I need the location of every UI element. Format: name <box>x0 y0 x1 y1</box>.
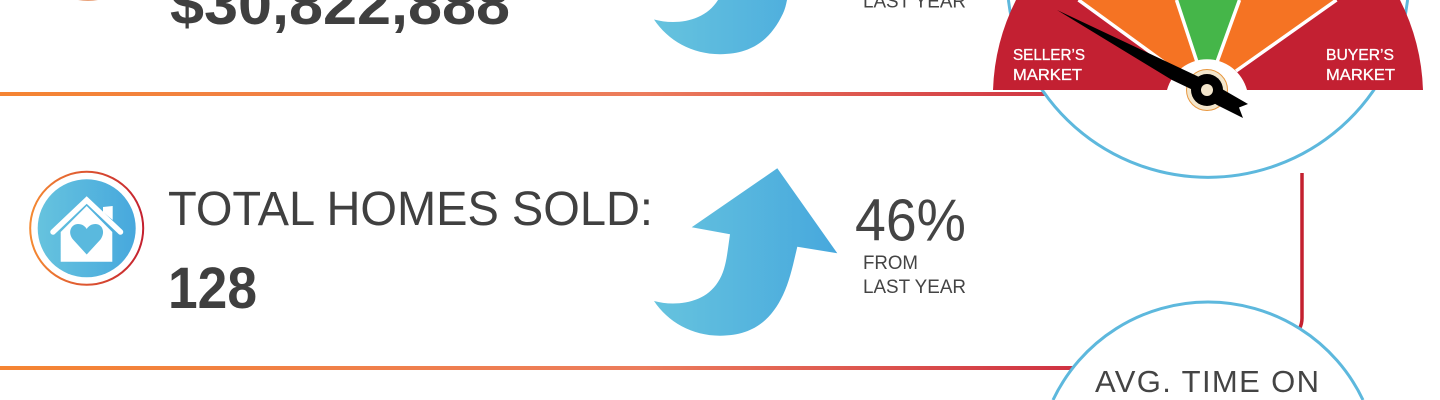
heart <box>70 224 103 254</box>
caption: from last year: FROM <box>863 253 918 274</box>
value: homes sold: 128 <box>168 256 257 321</box>
caption: from last year <box>863 253 966 298</box>
house chimney <box>103 206 113 220</box>
panel: average time on market circle <box>1053 302 1363 400</box>
connector: red vertical line <box>1300 173 1302 328</box>
heading: avg time on: AVG. TIME ON <box>1095 364 1319 399</box>
gauge orange segment <box>1078 0 1337 71</box>
gauge hub <box>1191 74 1223 106</box>
arrow: second row up arrow <box>654 168 837 336</box>
heading: total homes sold: TOTAL HOMES SOLD: <box>168 183 653 236</box>
label: seller's market <box>1013 47 1085 84</box>
house roof <box>53 200 120 232</box>
caption: from last year: LAST YEAR <box>863 277 966 298</box>
gauge white separators <box>1078 0 1336 71</box>
divider: second row gradient line <box>0 366 1074 370</box>
icon ring <box>30 172 143 285</box>
label: buyer's market <box>1326 47 1395 84</box>
gauge green segment <box>1177 0 1239 62</box>
house body <box>61 206 112 262</box>
divider: first row gradient line <box>0 92 1050 96</box>
label: buyer's market: BUYER’S <box>1326 47 1394 64</box>
gauge: market gauge dial <box>993 0 1423 177</box>
icon: clipped top row icon ring <box>78 0 98 1</box>
value: percent change: 46% <box>855 188 966 254</box>
gauge hub ring <box>1186 70 1228 110</box>
gauge outer circle <box>1008 0 1408 177</box>
gauge hub centre <box>1201 84 1213 96</box>
icon: house with heart <box>30 172 143 285</box>
label: seller's market: SELLER’S <box>1013 47 1085 64</box>
arrow: top row up arrow <box>654 0 787 54</box>
icon blue disc <box>38 179 136 277</box>
gauge red band <box>993 0 1423 90</box>
label: seller's market: MARKET <box>1013 67 1082 84</box>
gauge needle <box>1057 10 1248 118</box>
gauge white hub area <box>1167 59 1247 90</box>
label: buyer's market: MARKET <box>1326 67 1395 84</box>
